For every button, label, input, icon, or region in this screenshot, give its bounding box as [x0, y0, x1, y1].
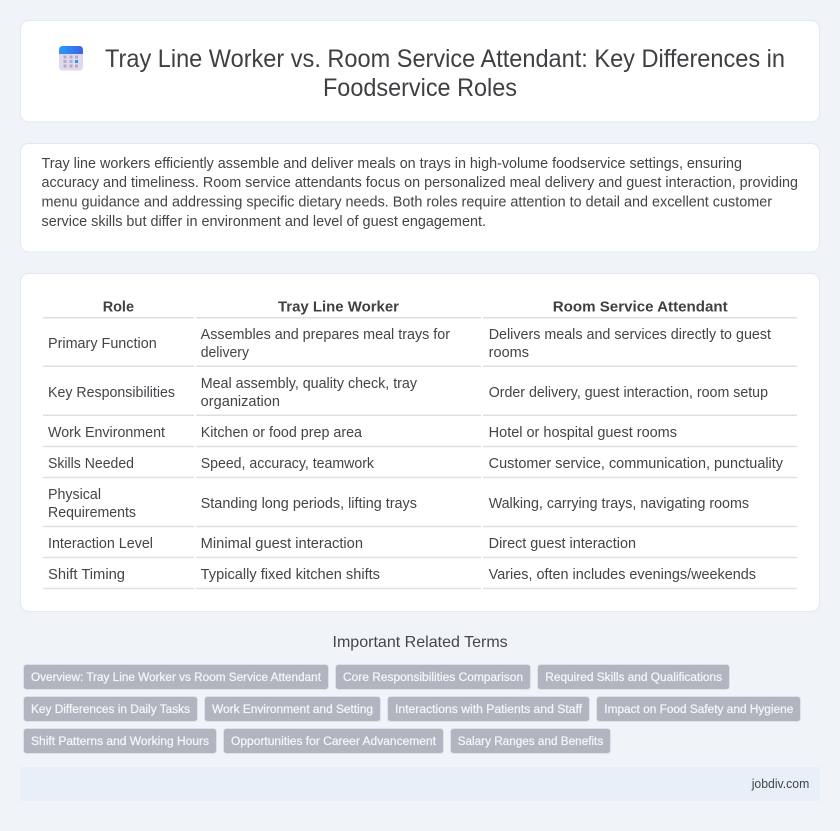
tag: Interactions with Patients and Staff — [395, 702, 583, 716]
row: physical requirements: Requirements — [48, 505, 136, 521]
footer source: jobdiv.com — [751, 777, 809, 791]
row: primary function: Delivers meals and services directly to guest — [489, 327, 771, 343]
row: primary function — [48, 327, 771, 361]
row: skills needed: Customer service, communication, punctuality — [489, 456, 784, 472]
row: interaction level: Minimal guest interaction — [201, 536, 363, 552]
row: key responsibilities: Meal assembly, quality check, tray — [201, 376, 418, 392]
intro paragraph: service skills but differ in environment and level of guest engagement. — [42, 214, 486, 230]
related term tags — [24, 664, 800, 754]
row: work environment: Kitchen or food prep area — [201, 425, 362, 441]
tag: Required Skills and Qualifications — [545, 670, 722, 684]
tag: Impact on Food Safety and Hygiene — [604, 702, 794, 716]
tag: Core Responsibilities Comparison — [343, 670, 523, 684]
tag: Work Environment and Setting — [212, 702, 373, 716]
tag: Overview: Tray Line Worker vs Room Service Attendant — [31, 670, 322, 684]
tag — [224, 728, 444, 754]
row: shift timing: Shift Timing — [48, 567, 125, 583]
tag: Shift Patterns and Working Hours — [31, 734, 209, 748]
footer bar — [20, 767, 820, 801]
title — [105, 45, 785, 102]
tag: Salary Ranges and Benefits — [458, 734, 603, 748]
intro paragraph: Tray line workers efficiently assemble and deliver meals on trays in high-volume foodservice settings, ensuring — [42, 156, 742, 172]
row: shift timing: Varies, often includes evenings/weekends — [489, 567, 756, 583]
row: physical requirements: Walking, carrying trays, navigating rooms — [489, 496, 749, 512]
row: key responsibilities: organization — [201, 394, 280, 410]
row: primary function: Primary Function — [48, 336, 157, 352]
row: interaction level: Direct guest interaction — [489, 536, 636, 552]
row: work environment: Work Environment — [48, 425, 165, 441]
tag — [24, 664, 328, 690]
tag — [596, 696, 800, 722]
row: key responsibilities: Order delivery, guest interaction, room setup — [489, 385, 768, 401]
panel: comparison table — [20, 274, 820, 612]
row: work environment: Hotel or hospital guest rooms — [489, 425, 677, 441]
tag — [204, 696, 380, 722]
title: Tray Line Worker vs. Room Service Attendant: Key Differences in — [105, 45, 785, 73]
row: physical requirements — [48, 487, 749, 521]
tag — [24, 696, 198, 722]
intro paragraph — [42, 156, 798, 230]
intro paragraph: accuracy and timeliness. Room service attendants focus on personalized meal delivery and guest interaction, providing — [42, 175, 798, 191]
panel: header — [20, 20, 820, 122]
row: primary function: delivery — [201, 345, 250, 361]
row: primary function: Assembles and prepares meal trays for — [201, 327, 450, 343]
table header row: Room Service Attendant — [553, 299, 728, 316]
row: primary function: rooms — [489, 345, 529, 361]
tag — [24, 728, 216, 754]
row: skills needed: Speed, accuracy, teamwork — [201, 456, 375, 472]
row: shift timing — [48, 567, 756, 583]
panel: introduction — [20, 144, 820, 252]
tag: Key Differences in Daily Tasks — [31, 702, 190, 716]
row: skills needed: Skills Needed — [48, 456, 134, 472]
tag — [388, 696, 590, 722]
row: key responsibilities: Key Responsibilities — [48, 385, 175, 401]
heading: important related terms: Important Related Terms — [332, 634, 508, 651]
row: skills needed — [48, 456, 784, 472]
table header row — [103, 299, 728, 316]
tag — [538, 664, 730, 690]
row: shift timing: Typically fixed kitchen shifts — [201, 567, 380, 583]
tag: Opportunities for Career Advancement — [231, 734, 437, 748]
tag — [336, 664, 530, 690]
row: physical requirements: Physical — [48, 487, 101, 503]
row: interaction level — [48, 536, 636, 552]
table header row: Tray Line Worker — [278, 299, 399, 316]
icon: calendar — [59, 46, 83, 70]
row: interaction level: Interaction Level — [48, 536, 153, 552]
table header row: Role — [103, 299, 134, 316]
row: key responsibilities — [48, 376, 768, 410]
intro paragraph: menu guidance and addressing specific dietary needs. Both roles require attention to detail and excellent customer — [42, 194, 772, 210]
row: work environment — [48, 425, 677, 441]
title: Foodservice Roles — [323, 74, 517, 102]
tag — [450, 728, 610, 754]
row: physical requirements: Standing long periods, lifting trays — [201, 496, 417, 512]
